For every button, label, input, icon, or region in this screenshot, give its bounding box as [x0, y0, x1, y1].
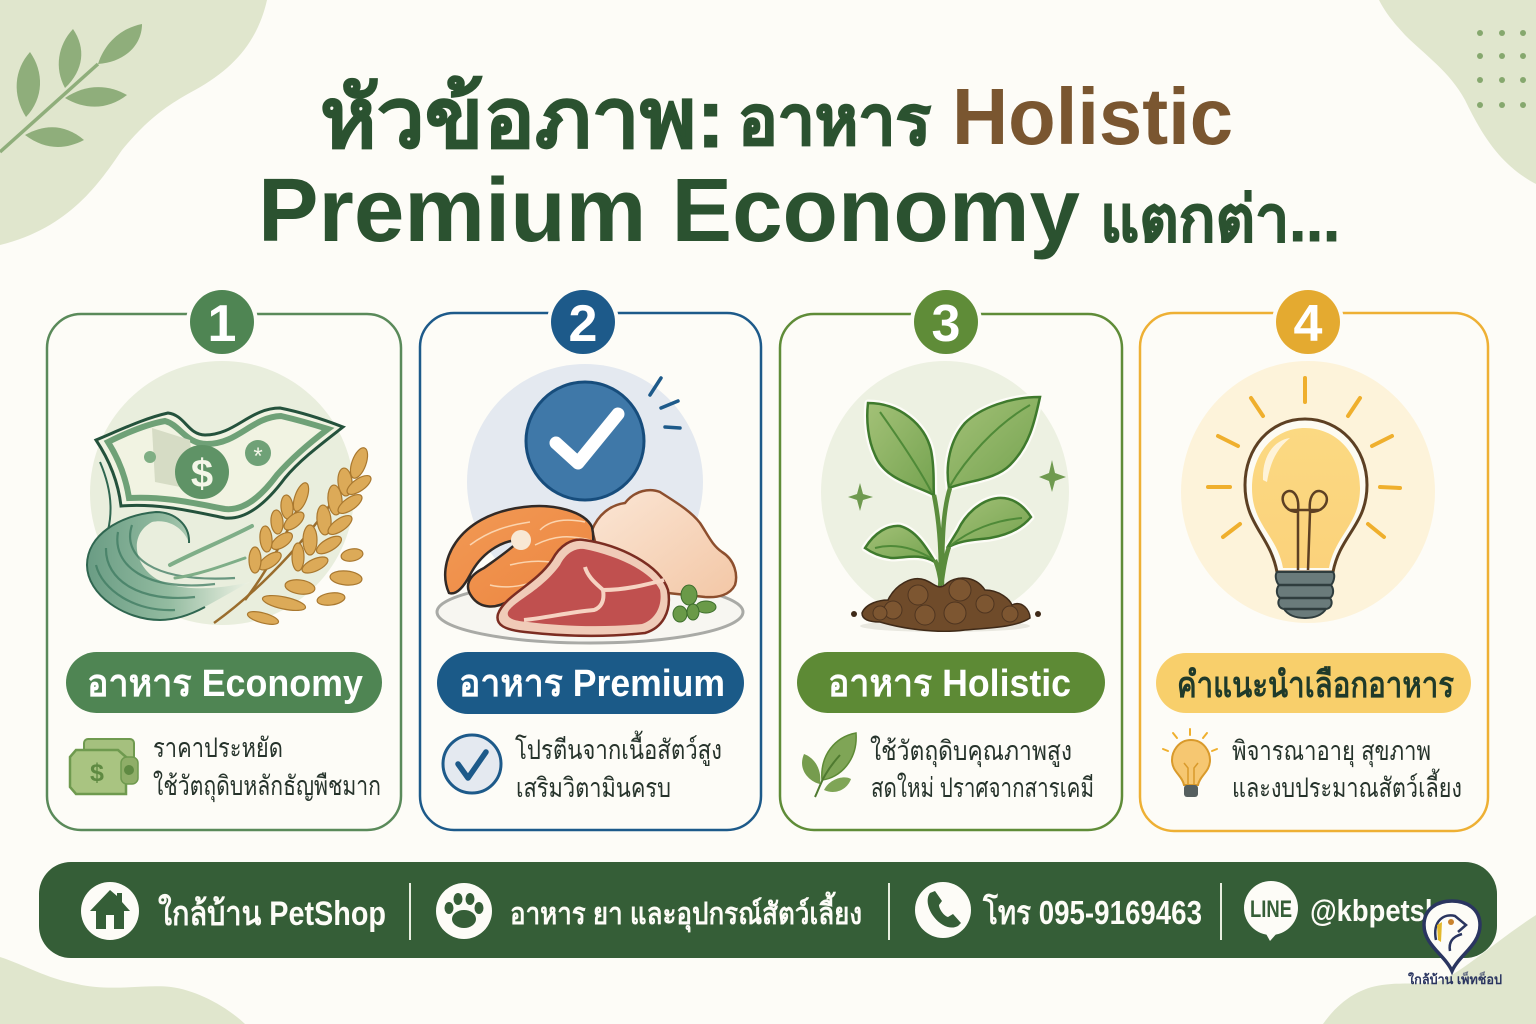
description: Advice	[1232, 736, 1462, 803]
description: Premium: โปรตีนจากเนื้อสัตว์สูง	[515, 730, 722, 766]
panel: Advice	[1140, 286, 1488, 831]
label pill: Premium	[437, 652, 744, 714]
panel: Premium	[420, 286, 761, 830]
step badge 2: 2	[569, 295, 597, 353]
footer bar	[39, 862, 1497, 958]
description: Economy	[153, 733, 381, 803]
phone number: โทร 095-9169463	[982, 893, 1202, 931]
panel: Economy	[47, 286, 401, 830]
label pill: Advice	[1156, 653, 1471, 713]
illustration: sprout	[821, 361, 1069, 632]
decoration: dot grid	[1477, 30, 1526, 108]
illustration: money wave and grain	[87, 361, 374, 627]
step badge 1: 1	[208, 295, 236, 353]
icon: check circle	[443, 735, 501, 793]
title: อาหาร	[738, 83, 931, 159]
label pill: Economy	[66, 652, 382, 713]
title: หัวข้อภาพ:	[320, 71, 725, 165]
step badge 3	[910, 286, 982, 358]
icon: cash: $	[90, 759, 104, 787]
illustration: check and proteins	[437, 364, 743, 643]
icon: LINE bubble	[1244, 881, 1298, 941]
step badge 1	[186, 286, 258, 358]
icon: paw	[436, 883, 492, 939]
step badge 4	[1272, 286, 1344, 358]
title: Holistic	[952, 72, 1233, 161]
title: Premium Economy	[258, 161, 1080, 261]
illustration: money wave and grain: *	[253, 443, 263, 470]
description: Holistic	[870, 735, 1094, 803]
products text: อาหาร ยา และอุปกรณ์สัตว์เลี้ยง	[510, 891, 862, 933]
logo caption: ใกล้บ้าน เพ็ทช็อป	[1408, 970, 1502, 987]
description: Advice: พิจารณาอายุ สุขภาพ	[1232, 736, 1431, 768]
icon: cash	[70, 739, 138, 794]
shop name: ใกล้บ้าน PetShop	[158, 893, 386, 933]
description: Premium	[515, 730, 722, 803]
step badge 2	[547, 286, 619, 358]
logo: map pin	[1408, 901, 1502, 987]
background blob: top right	[1379, 0, 1536, 184]
illustration: light bulb	[1181, 361, 1435, 623]
label pill: Holistic	[797, 652, 1105, 713]
label pill: Advice: คำแนะนำเลือกอาหาร	[1177, 664, 1455, 705]
icon: small bulb	[1163, 729, 1217, 797]
icon: phone	[915, 882, 971, 938]
background blob: top left	[0, 0, 267, 245]
description: Premium: เสริมวิตามินครบ	[516, 773, 671, 803]
step badge 3: 3	[932, 295, 960, 353]
background blob: bottom right	[1323, 915, 1536, 1024]
description: Holistic: ใช้วัตถุดิบคุณภาพสูง	[870, 735, 1072, 768]
label pill: Holistic: อาหาร Holistic	[828, 663, 1071, 705]
icon: leaf sprig	[802, 733, 856, 797]
title: แตกต่า...	[1100, 183, 1340, 255]
description: Economy: ใช้วัตถุดิบหลักธัญพืชมาก	[153, 770, 381, 803]
title	[258, 71, 1340, 261]
description: Holistic: สดใหม่ ปราศจากสารเคมี	[871, 772, 1094, 803]
label pill: Economy: อาหาร Economy	[87, 663, 363, 705]
illustration: money wave and grain: $	[191, 452, 213, 496]
label pill: Premium: อาหาร Premium	[459, 663, 725, 705]
decoration: leaf branch	[0, 24, 142, 152]
icon: house	[81, 882, 139, 940]
icon: LINE bubble: LINE	[1250, 896, 1292, 923]
panel: Holistic	[780, 286, 1122, 830]
LINE handle: @kbpetshop	[1310, 893, 1475, 928]
description: Economy: ราคาประหยัด	[153, 733, 283, 763]
background blob: bottom left	[0, 957, 245, 1024]
step badge 4: 4	[1294, 295, 1323, 353]
description: Advice: และงบประมาณสัตว์เลี้ยง	[1232, 768, 1462, 803]
